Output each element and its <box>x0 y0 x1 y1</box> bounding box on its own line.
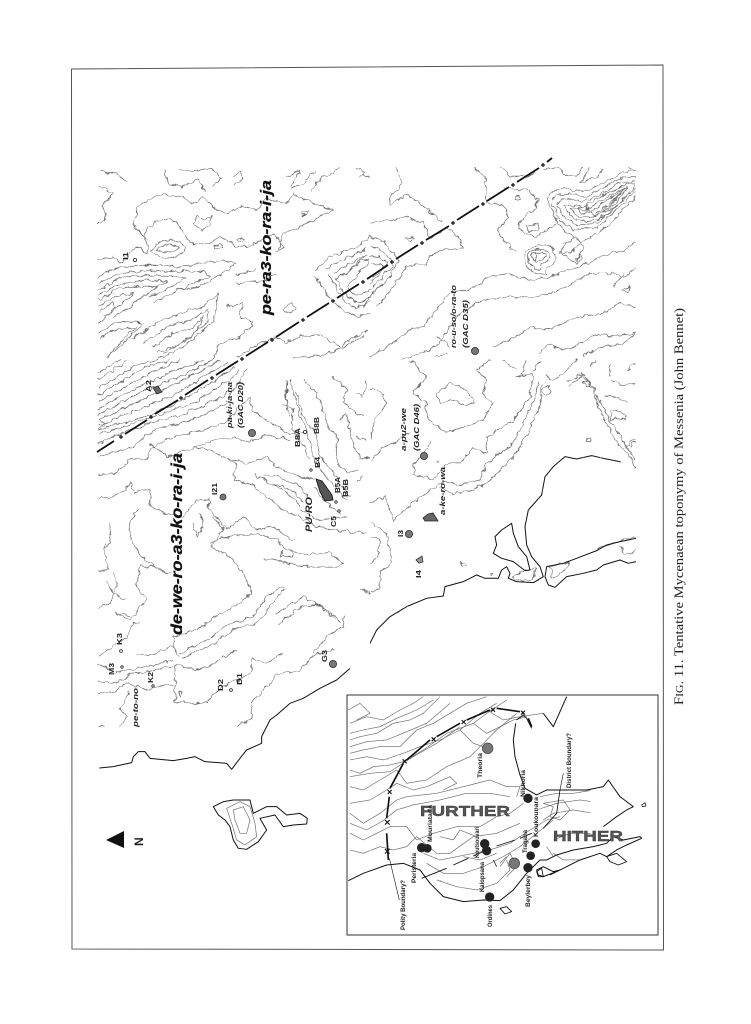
site labels: (GAC D20) <box>236 381 245 428</box>
inset labels: Ordines <box>488 904 494 927</box>
coastline of Messenian Gulf <box>350 456 636 668</box>
site labels: (GAC D46) <box>412 403 421 451</box>
inset labels: Beylerbey <box>526 874 532 907</box>
site labels: G3 <box>320 650 329 662</box>
site labels: K3 <box>115 633 124 645</box>
site markers <box>120 258 479 691</box>
inset labels: Mouriatada <box>428 804 434 842</box>
inset labels: Tragana <box>523 829 529 853</box>
site labels: a-ke-ro-wa <box>438 467 447 515</box>
site labels: D1 <box>235 673 244 685</box>
inset labels: District Boundary? <box>567 733 573 788</box>
inset labels: Peristeria <box>412 852 418 883</box>
inset polity boundary <box>387 708 532 860</box>
north arrow <box>106 831 146 848</box>
inset district boundary <box>422 790 560 878</box>
site labels: A2 <box>144 380 153 392</box>
inset coastlines <box>348 697 646 914</box>
inset boundary crosses <box>385 708 525 854</box>
site labels: B5A <box>333 476 342 493</box>
label: de-we-ro-a3-ko-ra-i-ja: de-we-ro-a3-ko-ra-i-ja <box>169 453 186 635</box>
site labels: B8A <box>293 427 302 447</box>
inset heading FURTHER: FURTHER <box>420 803 510 820</box>
site labels: M3 <box>107 663 116 675</box>
polity boundary line <box>97 158 552 452</box>
island of Sphacteria / Prote <box>213 800 307 849</box>
site labels: PU-RO <box>304 497 314 532</box>
peninsula coast <box>545 538 636 587</box>
site labels: B5B <box>341 478 350 497</box>
site labels: I21 <box>210 483 219 495</box>
lagoon <box>493 523 530 571</box>
western coastline <box>99 668 350 769</box>
site labels: I1 <box>121 252 130 260</box>
label: pe-ra3-ko-ra-i-ja: pe-ra3-ko-ra-i-ja <box>258 180 275 316</box>
inset site dots <box>417 743 540 902</box>
site labels: K2 <box>146 672 155 683</box>
topographic contour map <box>97 165 636 738</box>
inset labels: Koutsouvari <box>475 827 481 858</box>
site labels: D2 <box>216 679 225 691</box>
inset leader lines <box>389 773 563 900</box>
site labels: (GAC D35) <box>461 299 470 348</box>
inset map panel <box>347 695 658 935</box>
site labels: I3 <box>396 530 405 537</box>
inset labels: Koukounara <box>534 796 540 837</box>
north arrow: N <box>132 837 146 846</box>
figure caption: FIG. 11. Tentative Mycenaean toponymy of Messenia (John Bennet) <box>671 308 686 705</box>
site labels: a-pu2-we <box>399 408 408 451</box>
site labels: B8B <box>312 416 321 434</box>
site labels: I4 <box>414 569 423 578</box>
inset heading HITHER: HITHER <box>553 828 623 845</box>
inset labels: Nikhoria <box>521 769 527 797</box>
inset labels: Theoria <box>478 752 484 778</box>
site labels <box>107 252 470 728</box>
inset labels: Polity Boundary? <box>401 880 407 930</box>
site labels: C5 <box>329 516 338 527</box>
site labels: pa-ki-ja-na <box>225 382 234 429</box>
page frame <box>72 65 664 950</box>
inset labels: Kalopsana <box>480 861 486 892</box>
site labels: ro-u-so/o-ra-to <box>449 285 458 348</box>
site labels: pe-to-no <box>131 687 140 728</box>
site labels: B4 <box>313 456 322 468</box>
inset contours <box>348 697 627 890</box>
inset labels <box>401 733 573 930</box>
